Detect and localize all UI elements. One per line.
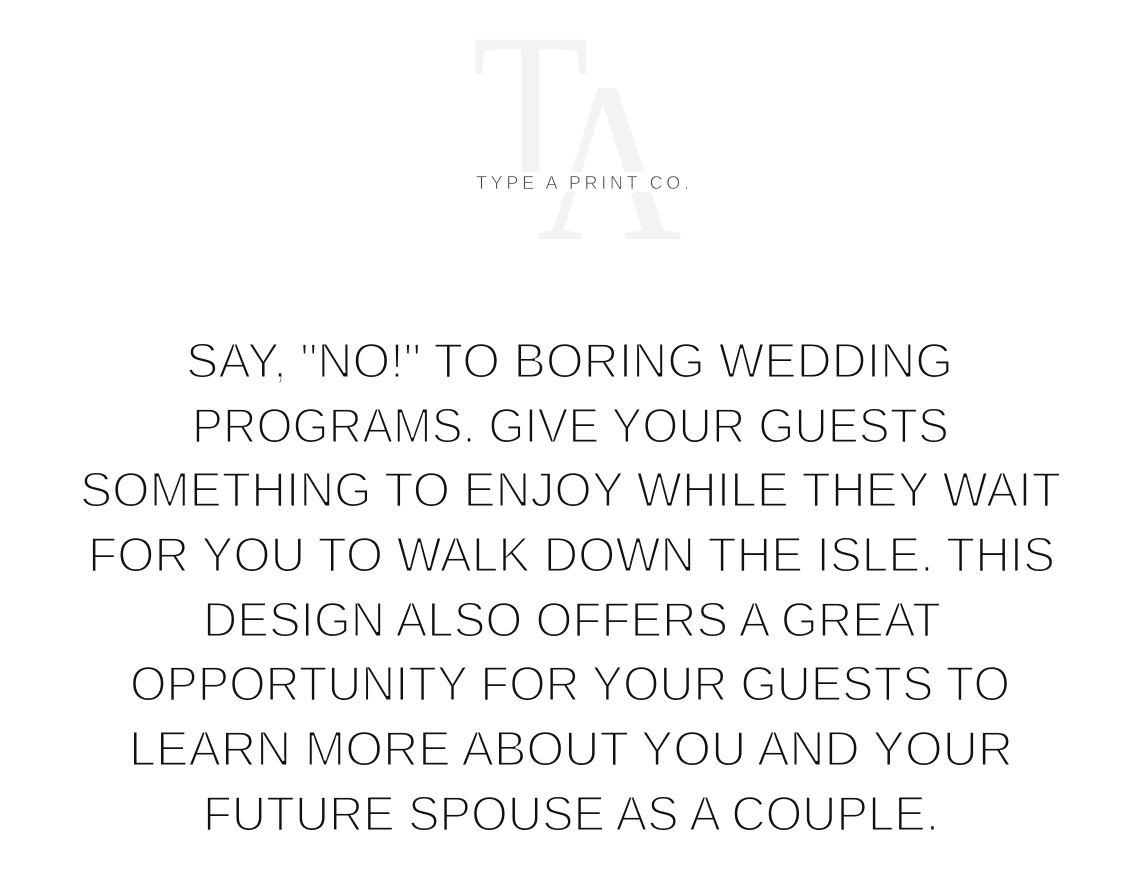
main statement text block: DESIGN ALSO OFFERS A GREAT xyxy=(203,594,941,648)
logo wordmark: TYPE A PRINT CO. xyxy=(476,173,689,193)
main statement text block: SOMETHING TO ENJOY WHILE THEY WAIT xyxy=(80,464,1061,518)
main statement text block: PROGRAMS. GIVE YOUR GUESTS xyxy=(192,400,949,454)
main statement text block: SAY, "NO!" TO BORING WEDDING xyxy=(186,334,953,388)
logo monogram letter A: A xyxy=(536,35,682,289)
main statement text block xyxy=(80,334,1061,842)
main statement text block: FUTURE SPOUSE AS A COUPLE. xyxy=(203,788,939,842)
main statement text block: FOR YOU TO WALK DOWN THE ISLE. THIS xyxy=(88,528,1055,582)
main statement text block: OPPORTUNITY FOR YOUR GUESTS TO xyxy=(130,658,1010,712)
logo: Type A Print Co. xyxy=(470,0,695,289)
main statement text block: LEARN MORE ABOUT YOU AND YOUR xyxy=(129,722,1013,776)
